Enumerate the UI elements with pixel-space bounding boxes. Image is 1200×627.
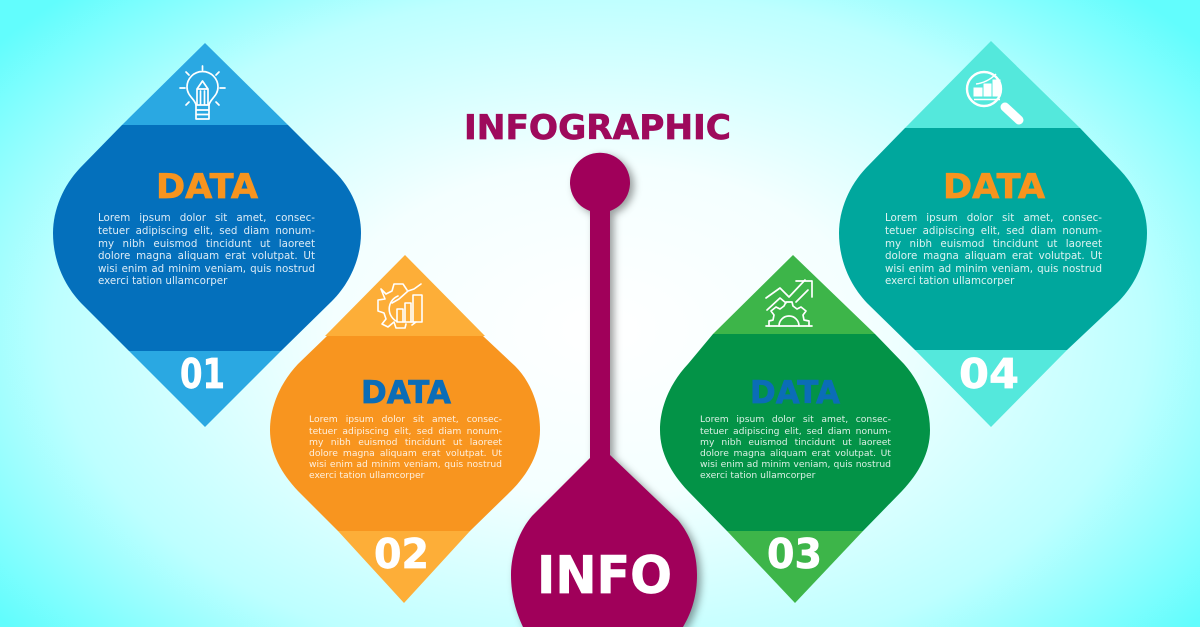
text block 01: dolore magna aliquam erat volutpat. Ut — [98, 250, 315, 262]
bottom tab: triangle 04 — [915, 350, 1067, 427]
icon: gear with growth arrow — [766, 280, 812, 326]
text block 03: tetuer adipiscing elit, sed diam nonum- — [700, 426, 891, 437]
icon: magnifier with chart — [967, 72, 1019, 120]
text block 01: my nibh euismod tincidunt ut laoreet — [98, 238, 315, 250]
bottom tab: triangle 03 — [727, 531, 863, 603]
heading: DATA 01: DATA — [156, 167, 259, 207]
text block 02: Lorem ipsum dolor sit amet, consec- — [309, 414, 502, 425]
heading: DATA 04: DATA — [943, 167, 1046, 207]
panel: data 01 — [53, 43, 361, 427]
number 01: 01 — [180, 350, 225, 398]
icon tab: top triangle 04 — [905, 41, 1080, 128]
bottom tab: triangle 01 — [129, 351, 281, 427]
body shape 04 — [839, 128, 1147, 350]
text block 02: exerci tation ullamcorper — [309, 470, 424, 481]
text block 03: wisi enim ad minim veniam, quis nostrud — [700, 459, 891, 470]
icon: light bulb with pencil — [180, 66, 225, 119]
body shape 03 — [660, 334, 930, 531]
pin shape — [511, 153, 697, 627]
text block 04: exerci tation ullamcorper — [885, 275, 1014, 287]
text block 02: tetuer adipiscing elit, sed diam nonum- — [309, 426, 502, 437]
text block 01 — [98, 212, 315, 287]
text block 03: Lorem ipsum dolor sit amet, consec- — [700, 414, 891, 425]
text block 01: Lorem ipsum dolor sit amet, consec- — [98, 212, 315, 224]
text block 01: tetuer adipiscing elit, sed diam nonum- — [98, 225, 315, 237]
label: INFO: INFO — [537, 546, 672, 606]
panel: data 03 — [660, 255, 930, 603]
number 02: 02 — [374, 530, 429, 578]
text block 01: wisi enim ad minim veniam, quis nostrud — [98, 263, 315, 275]
number 03: 03 — [767, 530, 822, 578]
text block 03 — [700, 414, 891, 481]
text block 04: Lorem ipsum dolor sit amet, consec- — [885, 212, 1102, 224]
text block 03: exerci tation ullamcorper — [700, 470, 815, 481]
heading: DATA 02: DATA — [361, 375, 451, 411]
text block 04 — [885, 212, 1102, 287]
text block 04: tetuer adipiscing elit, sed diam nonum- — [885, 225, 1102, 237]
title: INFOGRAPHIC — [464, 108, 731, 147]
icon tab: top triangle 01 — [122, 43, 288, 125]
text block 02: my nibh euismod tincidunt ut laoreet — [309, 437, 502, 448]
text block 04: my nibh euismod tincidunt ut laoreet — [885, 238, 1102, 250]
text block 04: dolore magna aliquam erat volutpat. Ut — [885, 250, 1102, 262]
number 04: 04 — [959, 350, 1019, 398]
text block 01: exerci tation ullamcorper — [98, 275, 227, 287]
panel: data 02 — [270, 255, 540, 603]
body shape 02 — [270, 336, 540, 531]
heading: DATA 03: DATA — [750, 375, 840, 411]
text block 02: wisi enim ad minim veniam, quis nostrud — [309, 459, 502, 470]
central pin: INFO — [510, 151, 706, 627]
text block 04: wisi enim ad minim veniam, quis nostrud — [885, 263, 1102, 275]
bottom tab: triangle 02 — [338, 531, 470, 603]
text block 03: dolore magna aliquam erat volutpat. Ut — [700, 448, 891, 459]
icon tab: top triangle 03 — [713, 255, 875, 334]
icon tab: top triangle 02 — [325, 255, 485, 336]
text block 03: my nibh euismod tincidunt ut laoreet — [700, 437, 891, 448]
panel: data 04 — [839, 41, 1147, 427]
text block 02: dolore magna aliquam erat volutpat. Ut — [309, 448, 502, 459]
text block 02 — [309, 414, 502, 481]
body shape 01 — [53, 125, 361, 351]
icon: gear with bar chart — [378, 284, 422, 328]
